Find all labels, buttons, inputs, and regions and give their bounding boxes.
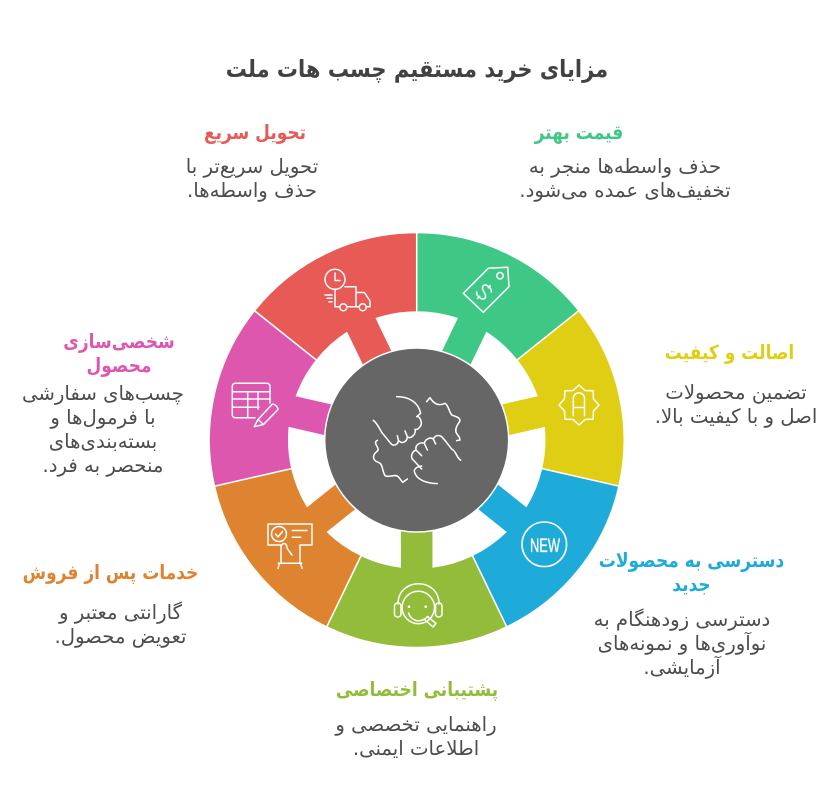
heading: access to new products: جدید xyxy=(672,573,711,596)
segment: product personalization xyxy=(194,306,351,508)
text: dedicated support: راهنمایی تخصصی و xyxy=(335,713,497,736)
text: better price xyxy=(519,155,731,202)
heading: product personalization: شخصی‌سازی xyxy=(63,330,175,353)
text: product personalization: بسته‌بندی‌های xyxy=(49,430,157,453)
text: authenticity and quality: اصل و با کیفیت بالا. xyxy=(655,405,817,428)
text: fast delivery: تحویل سریع‌تر با xyxy=(186,155,318,178)
text: access to new products xyxy=(594,608,770,679)
text: product personalization: چسب‌های سفارشی xyxy=(22,382,184,405)
segment: authenticity and quality xyxy=(482,306,639,508)
icon: support headset xyxy=(394,584,442,627)
segment: after-sales service xyxy=(198,424,404,640)
icon: table with pencil xyxy=(232,383,278,427)
segment: better price xyxy=(374,214,588,400)
text: dedicated support: اطلاعات ایمنی. xyxy=(353,737,479,760)
segment: access to new products xyxy=(429,424,635,640)
center circle xyxy=(325,348,509,532)
icon: new badge xyxy=(522,522,567,567)
text: better price: تخفیف‌های عمده می‌شود. xyxy=(519,179,731,202)
heading: after-sales service: خدمات پس از فروش xyxy=(23,561,198,584)
icon: delivery truck with clock xyxy=(325,269,370,311)
text: after-sales service: تعویض محصول. xyxy=(54,625,187,648)
text: access to new products: آزمایشی. xyxy=(643,656,721,679)
icon: quality badge xyxy=(559,385,599,425)
segment: dedicated support xyxy=(327,528,507,647)
icon: fist bump xyxy=(373,397,461,484)
text: dedicated support xyxy=(334,713,497,760)
text: access to new products: نوآوری‌ها و نمونه‌های xyxy=(598,632,766,655)
title: مزایای خرید مستقیم چسب هات ملت xyxy=(226,55,608,83)
text: product personalization: منحصر به فرد. xyxy=(42,454,163,477)
text: product personalization xyxy=(22,382,184,477)
text: authenticity and quality: تضمین محصولات xyxy=(665,381,807,404)
segment: fast delivery xyxy=(246,214,460,400)
heading: authenticity and quality: اصالت و کیفیت xyxy=(665,341,794,364)
heading: dedicated support: پشتیبانی اختصاصی xyxy=(336,678,498,701)
text: after-sales service: گارانتی معتبر و xyxy=(59,601,182,624)
heading: better price: قیمت بهتر xyxy=(535,121,623,144)
heading: product personalization xyxy=(63,330,175,377)
text: fast delivery: حذف واسطه‌ها. xyxy=(187,179,317,202)
text: fast delivery xyxy=(186,155,318,202)
heading: access to new products xyxy=(599,549,784,596)
text: after-sales service xyxy=(54,601,187,648)
icon: price tag xyxy=(463,267,509,312)
icon: presentation with check xyxy=(268,524,312,568)
heading: access to new products: دسترسی به محصولات xyxy=(599,549,784,572)
text: access to new products: دسترسی زودهنگام به xyxy=(594,608,770,631)
text: better price: حذف واسطه‌ها منجر به xyxy=(529,155,721,178)
text: product personalization: با فرمول‌ها و xyxy=(50,406,156,429)
text: authenticity and quality xyxy=(655,381,817,428)
heading: fast delivery: تحویل سریع xyxy=(204,121,306,144)
heading: product personalization: محصول xyxy=(87,354,151,377)
icon: new badge: NEW xyxy=(530,536,560,557)
